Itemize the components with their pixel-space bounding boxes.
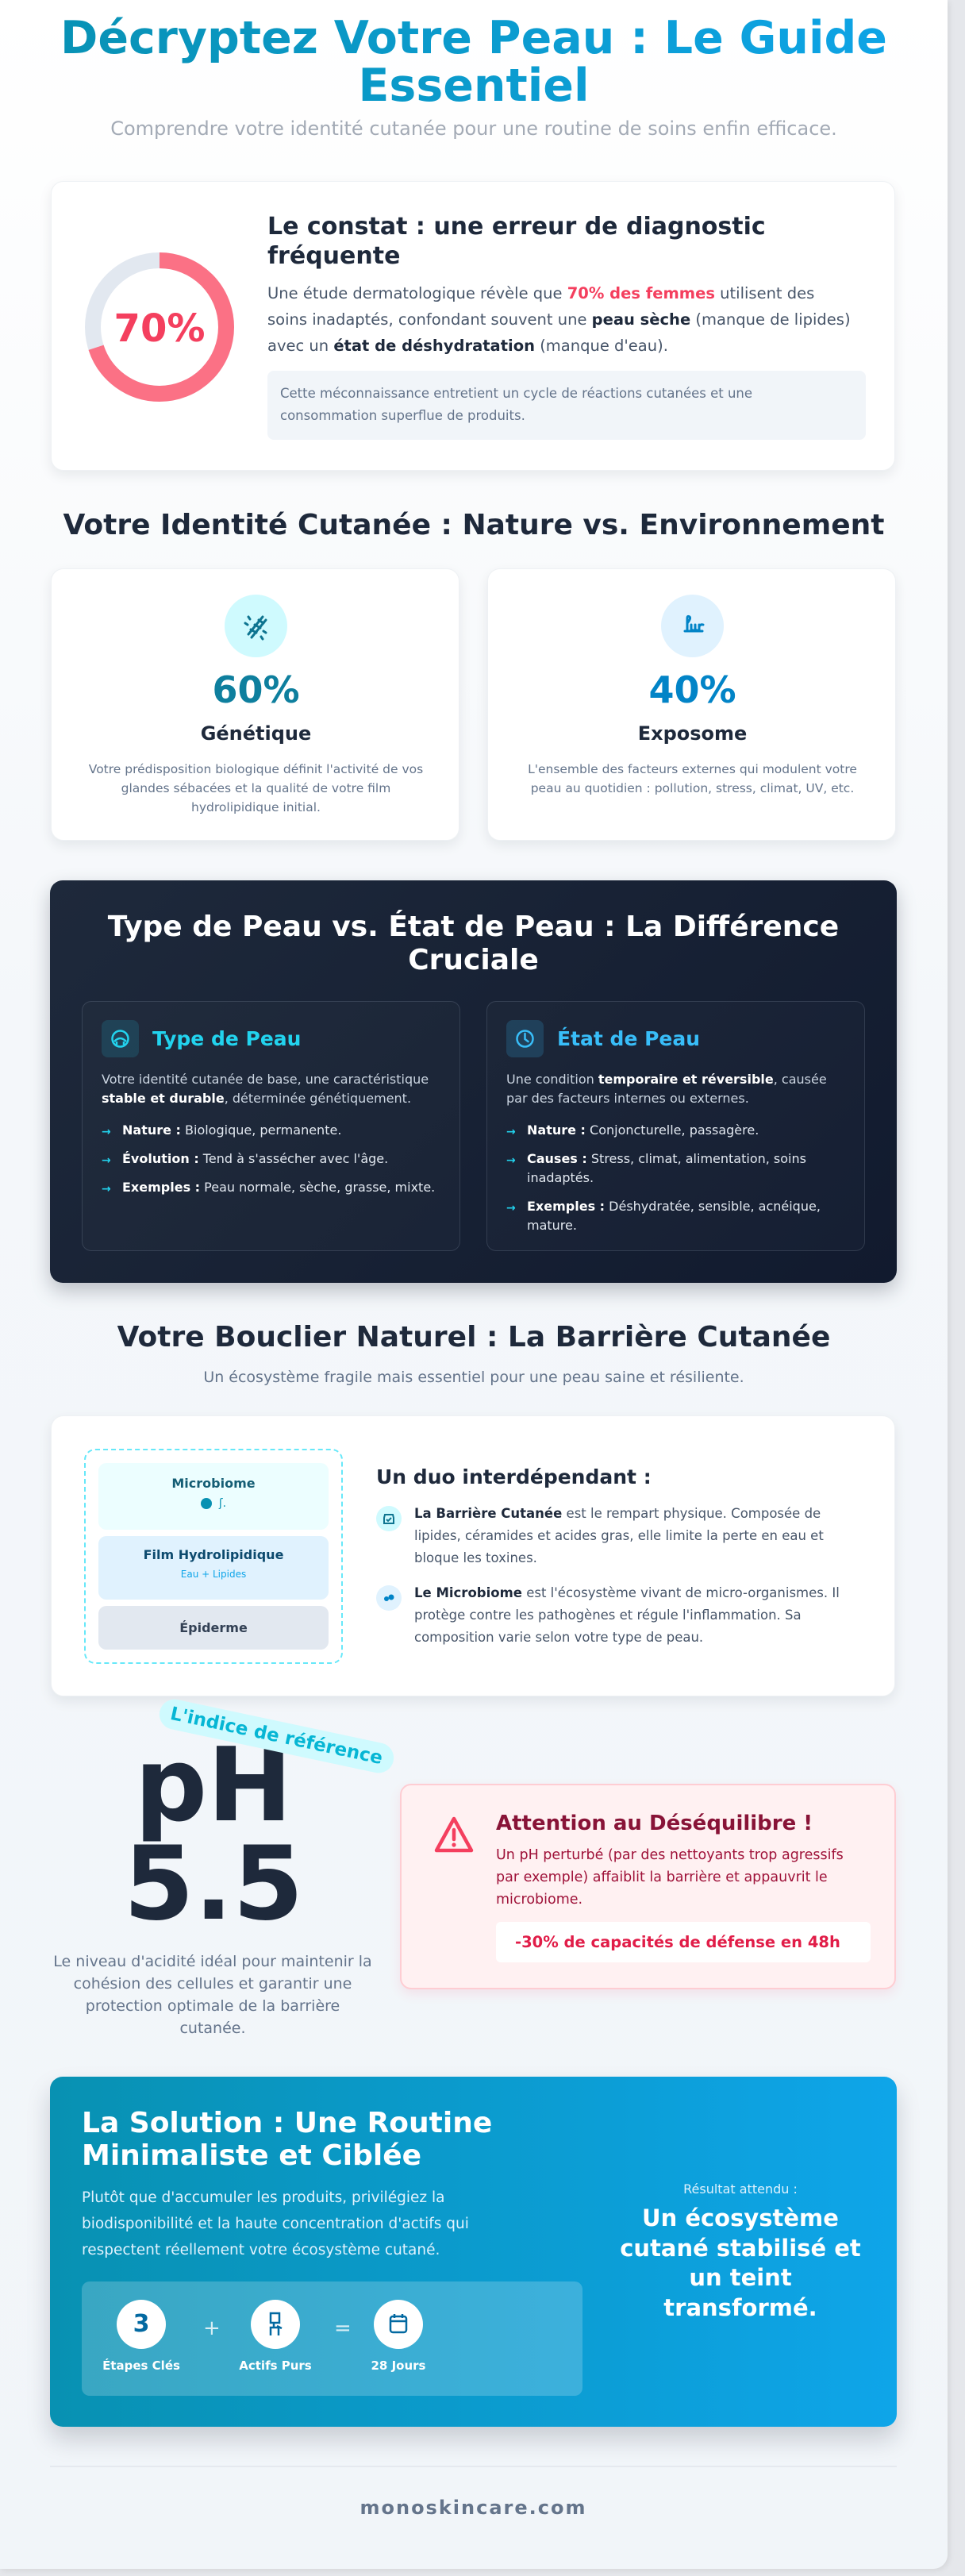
heading: identité cutanée: Votre Identité Cutanée : Nature vs. Environnement: [63, 509, 884, 541]
badge: indice de référence: L'indice de référence: [168, 1704, 384, 1769]
text: exposome desc: L'ensemble des facteurs externes qui modulent votre peau au quotidien : pollution, stress, climat, UV, etc.: [528, 762, 857, 795]
layer: film hydrolipidique: Eau + Lipides: [181, 1569, 246, 1580]
stat: pH 5.5: pH: [135, 1727, 292, 1845]
heading: type vs état: Type de Peau vs. État de Peau : La Différence: [108, 911, 839, 943]
callout: déséquilibre: [400, 1784, 896, 1989]
step: 3 étapes: Étapes Clés: [102, 2358, 180, 2373]
layer: film hydrolipidique: Film Hydrolipidique: [144, 1547, 283, 1562]
callout: note: [267, 371, 866, 440]
text: constat body: avec un état de déshydratation (manque d'eau).: [267, 337, 668, 355]
heading: type vs état: Cruciale: [408, 944, 539, 976]
list: type bullets: Évolution : Tend à s'assécher avec l'âge.: [122, 1151, 388, 1166]
donut chart 70%: [85, 252, 234, 402]
footer: brand: monoskincare.com: [359, 2497, 587, 2519]
heading: état de peau: État de Peau: [557, 1027, 700, 1050]
icon: warning: [435, 1816, 473, 1853]
panel: génétique: [51, 568, 459, 841]
icon: bacteria: [376, 1585, 402, 1611]
subtitle: Comprendre votre identité cutanée pour une routine de soins enfin efficace.: [110, 117, 837, 140]
text: type desc: Votre identité cutanée de base, une caractéristique stable et durable, déterminée génétiquement.: [102, 1072, 429, 1106]
layer: microbiome: ʃ.: [219, 1497, 226, 1510]
card: type de peau: [82, 1001, 460, 1251]
text: constat body: [267, 284, 851, 355]
text: attention body: Un pH perturbé (par des nettoyants trop agressifs par exemple) affaiblit la barrière et appauvrit le microbiome.: [496, 1847, 844, 1908]
panel: type vs état (dark): [50, 880, 897, 1283]
stat: pH 5.5: [124, 1727, 303, 1943]
layer: épiderme: [98, 1606, 329, 1650]
icon: environment: [661, 595, 724, 657]
list: état bullets: Exemples : Déshydratée, sensible, acnéique, mature.: [527, 1199, 821, 1233]
list: type bullets: Exemples : Peau normale, sèche, grasse, mixte.: [122, 1180, 435, 1195]
donut chart 70%: 70%: [114, 306, 205, 351]
item: microbiome: Le Microbiome est l'écosystème vivant de micro-organismes. Il protège contre les pathogènes et régule l'inflammation. Sa composition varie selon votre type de peau.: [414, 1585, 840, 1645]
step: 3 étapes: [102, 2300, 180, 2373]
stat: pH 5.5: 5.5: [124, 1825, 303, 1943]
heading: type de peau: Type de Peau: [152, 1027, 301, 1050]
operator: equals: =: [334, 2316, 352, 2340]
text: constat body: Une étude dermatologique révèle que 70% des femmes utilisent des: [267, 284, 814, 302]
icon: dna: [225, 595, 287, 657]
icon: shield: [376, 1506, 402, 1531]
diagram: skin layers: [84, 1449, 343, 1664]
card: état de peau: [486, 1001, 865, 1251]
step: actifs purs: [239, 2300, 312, 2373]
title: Décryptez Votre Peau : Le Guide: [60, 12, 887, 64]
step: actifs purs: Actifs Purs: [239, 2358, 312, 2373]
step: 3 étapes: 3: [133, 2310, 149, 2338]
heading: duo: Un duo interdépendant :: [376, 1465, 652, 1488]
text: génétique desc: Votre prédisposition biologique définit l'activité de vos glandes sébacées et la qualité de votre film hydrolipidique initial.: [89, 762, 423, 814]
title: [0, 14, 948, 110]
step: 28 jours: 28 Jours: [371, 2358, 425, 2373]
footer: brand: [50, 2466, 897, 2520]
panel: constat: [51, 181, 895, 471]
stat: -30%: -30% de capacités de défense en 48h: [515, 1933, 840, 1951]
stat: 60%: 60%: [212, 668, 300, 711]
item: barrière: La Barrière Cutanée est le rempart physique. Composée de lipides, céramides et acides gras, elle limite la perte en eau et bloque les toxines.: [414, 1506, 824, 1565]
list: état bullets: [506, 1122, 821, 1233]
layer: film hydrolipidique: [98, 1536, 329, 1600]
step: 28 jours: [371, 2300, 425, 2373]
text: résultat: Résultat attendu :: [683, 2181, 798, 2197]
icon: clock: [506, 1020, 544, 1057]
panel: exposome: [487, 568, 896, 841]
list: état bullets: Causes : Stress, climat, alimentation, soins inadaptés.: [527, 1151, 806, 1185]
subtitle: bouclier: Un écosystème fragile mais essentiel pour une peau saine et résiliente.: [203, 1369, 744, 1386]
text: pH caption: Le niveau d'acidité idéal pour maintenir la cohésion des cellules et garantir une protection optimale de la barrière cutanée.: [53, 1953, 372, 2037]
text: résultat: Un écosystème cutané stabilisé et un teint transformé.: [620, 2204, 861, 2321]
panel: barrière cutanée: [51, 1415, 895, 1696]
text: solution body: Plutôt que d'accumuler les produits, privilégiez la biodisponibilité et la haute concentration d'actifs qui respectent réellement votre écosystème cutané.: [82, 2189, 469, 2258]
icon: fingerprint: [102, 1020, 139, 1057]
heading: type vs état: [108, 910, 839, 976]
text: constat body: soins inadaptés, confondant souvent une peau sèche (manque de lipides): [267, 310, 851, 329]
panel: solution: [50, 2077, 897, 2427]
heading: solution: La Solution : Une Routine Minimaliste et Ciblée: [82, 2107, 492, 2172]
label: génétique: Génétique: [201, 722, 311, 745]
text: état desc: Une condition temporaire et réversible, causée par des facteurs internes ou externes.: [506, 1072, 827, 1106]
heading: bouclier naturel: Votre Bouclier Naturel : La Barrière Cutanée: [117, 1321, 830, 1353]
title: Essentiel: [358, 60, 589, 112]
layer: épiderme: Épiderme: [179, 1620, 248, 1635]
layer: microbiome: Microbiome: [171, 1476, 256, 1491]
layer: microbiome: [98, 1463, 329, 1530]
heading: constat: Le constat : une erreur de diagnostic fréquente: [267, 213, 766, 270]
heading: attention: Attention au Déséquilibre !: [496, 1812, 813, 1835]
list: type bullets: [102, 1122, 435, 1195]
equation: routine: [82, 2281, 582, 2396]
callout: note: Cette méconnaissance entretient un cycle de réactions cutanées et une consommation superflue de produits.: [280, 386, 752, 423]
label: exposome: Exposome: [638, 722, 747, 745]
stat: 40%: 40%: [648, 668, 736, 711]
list: type bullets: Nature : Biologique, permanente.: [122, 1122, 341, 1138]
operator: plus: +: [203, 2316, 221, 2340]
list: état bullets: Nature : Conjoncturelle, passagère.: [527, 1122, 759, 1138]
stat: -30%: [496, 1922, 871, 1962]
